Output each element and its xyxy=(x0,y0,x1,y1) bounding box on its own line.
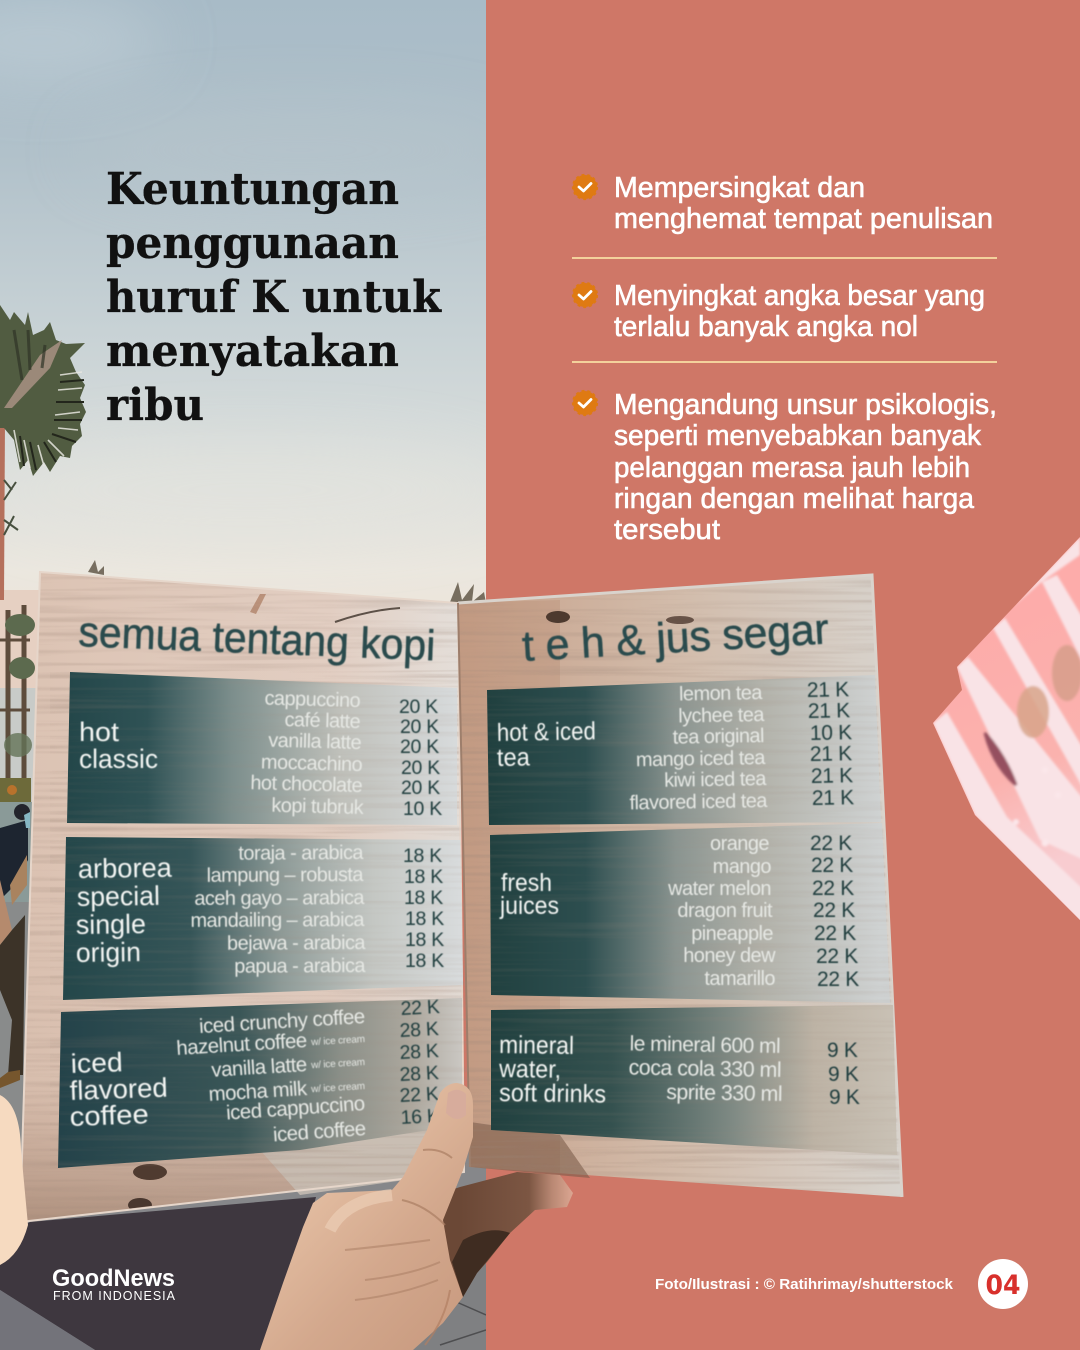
text block: benefit 3: Mengandung unsur psikologis, xyxy=(614,389,997,421)
logo: GoodNews from Indonesia: FROM INDONESIA xyxy=(53,1289,176,1303)
text block: left menu page: 28 K xyxy=(399,1062,439,1086)
icon: check badge 2 xyxy=(573,283,597,307)
text block: right menu page: 21 K xyxy=(808,699,850,723)
text block: left menu page: iced cappuccino xyxy=(225,1092,365,1125)
text block: left menu page: flavored xyxy=(69,1073,168,1106)
text block: right menu page: honey dew xyxy=(683,945,776,967)
text block: right menu page: mango iced tea xyxy=(636,747,767,771)
panel: left menu page panels xyxy=(58,672,463,1168)
text block: left menu page: 20 K xyxy=(400,736,439,758)
text block: left menu page: 20 K xyxy=(399,696,438,718)
text block: left menu page: bejawa - arabica xyxy=(227,932,366,955)
text block: right menu page: 9 K xyxy=(828,1063,859,1086)
text block: left menu page: vanilla latte xyxy=(211,1053,307,1082)
text block: left menu page: hot chocolate xyxy=(250,772,363,797)
text block: left menu page: iced xyxy=(70,1047,123,1079)
text block: left menu page xyxy=(69,608,444,1146)
text block: right menu page: orange xyxy=(710,833,769,855)
text block: left menu page: 20 K xyxy=(401,777,440,799)
text block: benefit 3: ringan dengan melihat harga xyxy=(614,483,975,515)
text block: left menu page: papua - arabica xyxy=(234,955,366,978)
text block: right menu page: kiwi iced tea xyxy=(664,768,768,792)
text block: right menu page: 22 K xyxy=(810,832,852,855)
text block: right menu page: dragon fruit xyxy=(677,900,773,922)
text block: left menu page: semua tentang kopi xyxy=(78,608,436,670)
text block: benefit 2: Menyingkat angka besar yang xyxy=(614,280,985,312)
text block: right menu page: mineral xyxy=(499,1031,574,1060)
text block: right menu page: 21 K xyxy=(811,764,853,788)
text block: right menu page: fresh xyxy=(501,869,552,897)
text block: left menu page: hazelnut coffee xyxy=(176,1029,307,1060)
text block: left menu page: moccachino xyxy=(261,751,363,776)
title: penggunaan xyxy=(106,218,399,269)
text block: right menu page: soft drinks xyxy=(499,1079,606,1108)
title: Keuntungan xyxy=(106,164,399,215)
text block: left menu page: single xyxy=(76,909,146,940)
panel: bench and pavement xyxy=(0,1150,486,1350)
text block: left menu page: 18 K xyxy=(405,950,444,972)
text block: right menu page: water melon xyxy=(667,878,771,900)
text block: right menu page: 22 K xyxy=(814,922,856,945)
panel: right menu page panels xyxy=(50,670,910,1170)
text block: left menu page: iced crunchy coffee xyxy=(198,1005,365,1038)
text block: right menu page: 22 K xyxy=(816,945,858,968)
text block: left menu page: arborea xyxy=(78,853,173,884)
panel: menu book xyxy=(0,560,920,1240)
text block: right menu page: 10 K xyxy=(810,721,852,745)
title: menyatakan xyxy=(106,326,399,377)
text block: right menu page: pineapple xyxy=(691,923,773,945)
text block: left menu page: w/ ice cream xyxy=(310,1081,365,1095)
text block: left menu page: coffee xyxy=(69,1099,149,1132)
text block: left menu page: mandailing – arabica xyxy=(190,909,365,932)
text block: left menu page: w/ ice cream xyxy=(310,1034,365,1048)
text block: right menu page: 22 K xyxy=(811,854,853,877)
text block: left menu page: lampung – robusta xyxy=(207,864,364,887)
text block: right menu page: t e h & jus segar xyxy=(521,605,830,671)
page number badge xyxy=(978,1259,1028,1309)
text block: right menu page: mango xyxy=(713,856,771,878)
text block: right menu page: flavored iced tea xyxy=(629,790,769,814)
icon: palm tree xyxy=(0,305,86,600)
text block: right menu page: juices xyxy=(499,892,559,920)
text block: left menu page: iced coffee xyxy=(272,1117,366,1146)
text block: left menu page: mocha milk xyxy=(208,1077,309,1106)
text block: left menu page: 18 K xyxy=(405,929,444,951)
text block: left menu page: 18 K xyxy=(404,866,443,888)
text block: right menu page: 22 K xyxy=(812,877,854,900)
text block: right menu page: lychee tea xyxy=(678,704,765,727)
text block: benefit 3: pelanggan merasa jauh lebih xyxy=(614,452,970,484)
text block: left menu page: vanilla latte xyxy=(268,730,362,754)
text block: benefit 3: seperti menyebabkan banyak xyxy=(614,420,981,452)
text block: left menu page: aceh gayo – arabica xyxy=(194,887,365,910)
text block: left menu page: 22 K xyxy=(400,996,440,1020)
text block: left menu page: w/ ice cream xyxy=(310,1057,365,1071)
text block: left menu page: 16 K xyxy=(400,1105,440,1129)
text block: right menu page xyxy=(497,605,860,1109)
text block: benefit 3: tersebut xyxy=(614,514,720,546)
text block: right menu page: 21 K xyxy=(812,786,854,810)
text block: left menu page: 28 K xyxy=(399,1040,439,1064)
text block: right menu page: 21 K xyxy=(810,742,852,766)
panel: sky photo background xyxy=(0,0,520,1210)
text block: left menu page: café latte xyxy=(284,709,361,733)
text block: left menu page: 18 K xyxy=(403,845,442,867)
logo: GoodNews from Indonesia: GoodNews xyxy=(52,1265,175,1292)
text block: right menu page: le mineral 600 ml xyxy=(629,1032,780,1058)
title: ribu xyxy=(106,380,204,431)
text block: right menu page: tamarillo xyxy=(704,968,775,990)
title xyxy=(106,164,442,431)
text block: right menu page: hot & iced xyxy=(497,717,596,747)
text block: right menu page: coca cola 330 ml xyxy=(628,1055,781,1082)
text block: right menu page: tea original xyxy=(672,725,764,749)
text block: left menu page: toraja - arabica xyxy=(238,842,364,865)
text block: left menu page: 28 K xyxy=(399,1018,439,1042)
text block: left menu page: cappuccino xyxy=(264,688,361,712)
text block: left menu page: 18 K xyxy=(404,887,443,909)
text block: left menu page: 22 K xyxy=(399,1083,439,1107)
text block: left menu page: 18 K xyxy=(405,908,444,930)
text block: benefit 3 xyxy=(614,389,997,546)
text block: right menu page: 9 K xyxy=(829,1086,860,1109)
icon: hand holding menu xyxy=(0,1083,573,1350)
text block: right menu page: 21 K xyxy=(807,678,849,702)
text block: right menu page: 22 K xyxy=(813,899,855,922)
text block: left menu page: kopi tubruk xyxy=(271,795,365,819)
text block: benefit 2: terlalu banyak angka nol xyxy=(614,311,918,343)
text block: right menu page: lemon tea xyxy=(679,682,764,705)
text block: benefit 1: menghemat tempat penulisan xyxy=(614,203,993,235)
text block: right menu page: 9 K xyxy=(827,1039,858,1062)
text block: benefit 1 xyxy=(614,172,993,235)
icon: check badge 1 xyxy=(573,175,597,199)
text block: right menu page: 22 K xyxy=(817,968,859,991)
text block: left menu page: origin xyxy=(76,937,141,968)
text block: right menu page: sprite 330 ml xyxy=(666,1080,782,1106)
icon: pink decorative photo xyxy=(925,530,1080,930)
icon: check badge 3 xyxy=(573,391,597,415)
text block: left menu page: 20 K xyxy=(401,757,440,779)
caption: photo credit: Foto/Ilustrasi : © Ratihrimay/shutterstock xyxy=(655,1276,954,1293)
title: huruf K untuk xyxy=(106,272,442,323)
text block: benefit 1: Mempersingkat dan xyxy=(614,172,865,204)
text block: left menu page: hot xyxy=(79,717,120,747)
page number badge: 04 xyxy=(986,1270,1020,1301)
text block: benefit 2 xyxy=(614,280,985,343)
text block: right menu page: water, xyxy=(498,1055,561,1084)
text block: left menu page: 10 K xyxy=(403,798,442,820)
text block: left menu page: 20 K xyxy=(400,716,439,738)
text block: left menu page: special xyxy=(77,881,160,912)
text block: right menu page: tea xyxy=(497,743,530,772)
icon: background trees and people xyxy=(0,605,35,1088)
text block: left menu page: classic xyxy=(79,744,158,774)
